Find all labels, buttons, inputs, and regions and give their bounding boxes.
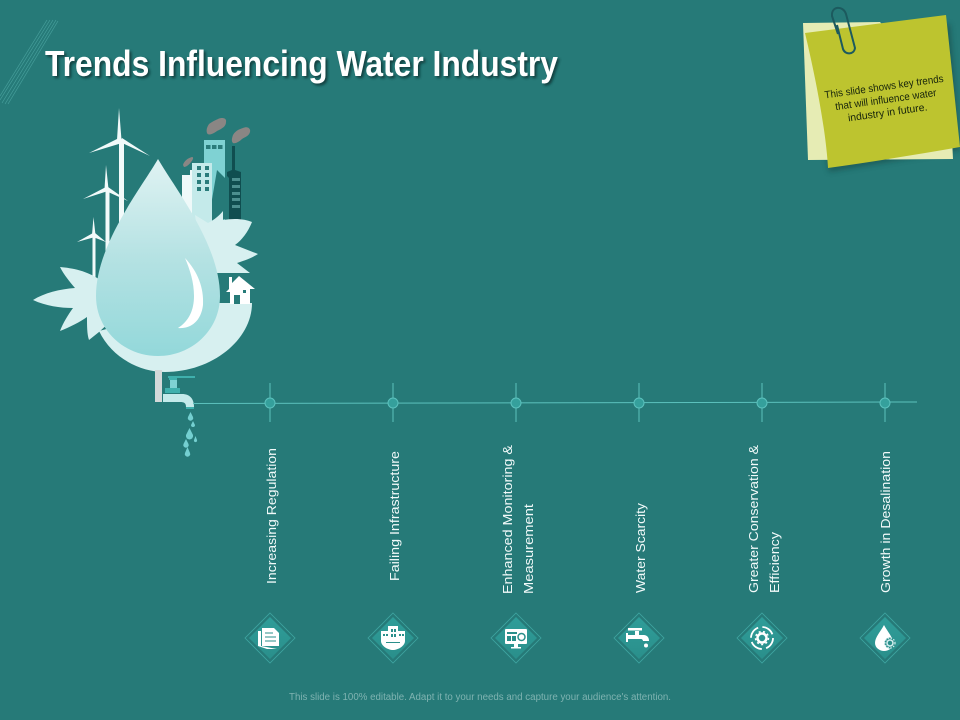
label: Failing Infrastructure: Failing Infrastructure bbox=[387, 451, 402, 581]
note text: that will influence water bbox=[835, 87, 938, 113]
icon: drop with gear bbox=[860, 613, 910, 663]
note back sheet bbox=[803, 22, 953, 160]
label: Growth in Desalination: Growth in Desalination bbox=[878, 451, 893, 593]
leaves right bbox=[195, 211, 258, 273]
wind turbine large bbox=[89, 108, 150, 225]
rotated trend labels bbox=[264, 445, 893, 594]
leaves left bbox=[33, 267, 112, 340]
icon: faucet bbox=[163, 376, 195, 409]
timeline bbox=[193, 383, 917, 422]
icon: city shield bbox=[368, 613, 418, 663]
title: Trends Influencing Water Industry bbox=[47, 45, 560, 86]
icon: gear cycle bbox=[737, 613, 787, 663]
title: Trends Influencing Water Industry bbox=[45, 43, 558, 84]
node 5 bbox=[757, 383, 767, 422]
wind turbine small bbox=[77, 217, 106, 285]
note text bbox=[824, 73, 948, 127]
node 6 bbox=[880, 383, 890, 422]
water drop bbox=[96, 159, 220, 356]
sticky note bbox=[803, 8, 960, 172]
node 1 bbox=[265, 383, 275, 422]
crescent bowl bbox=[99, 303, 252, 372]
icon: paper clip bbox=[832, 8, 855, 53]
dark chimney tower bbox=[227, 146, 241, 222]
wind turbine medium bbox=[83, 165, 128, 259]
label: Water Scarcity: Water Scarcity bbox=[633, 502, 648, 593]
pale tower bbox=[192, 163, 212, 233]
note text: industry in future. bbox=[847, 101, 928, 124]
label: Enhanced Monitoring & Measurement: Measurement bbox=[521, 504, 536, 594]
label: Greater Conservation & Efficiency: Greater Conservation & bbox=[746, 445, 761, 593]
label: Greater Conservation & Efficiency: Efficiency bbox=[767, 531, 782, 593]
pipe bbox=[155, 370, 162, 402]
smoke clouds bbox=[207, 118, 226, 134]
label: Enhanced Monitoring & Measurement: Enhanced Monitoring & bbox=[500, 445, 515, 594]
label: Increasing Regulation: Increasing Regulation bbox=[264, 448, 279, 584]
teal tower bbox=[204, 140, 225, 230]
footer note: This slide is 100% editable. Adapt it to your needs and capture your audience's attention. bbox=[289, 692, 671, 703]
note text: This slide shows key trends bbox=[824, 73, 944, 101]
note soft shadow bbox=[806, 24, 960, 172]
icon: monitor with gear bbox=[491, 613, 541, 663]
city buildings bbox=[182, 118, 250, 233]
house bbox=[226, 276, 255, 304]
icon: documents bbox=[245, 613, 295, 663]
label: Enhanced Monitoring & Measurement bbox=[500, 445, 536, 594]
illustration: water drop landscape bbox=[33, 108, 258, 457]
node 3 bbox=[511, 383, 521, 422]
white block bbox=[182, 175, 193, 225]
node 4 bbox=[634, 383, 644, 422]
water drips bbox=[183, 412, 197, 457]
drop highlight bbox=[178, 258, 203, 328]
decorative corner hatch bbox=[0, 20, 58, 104]
label: Greater Conservation & Efficiency bbox=[746, 445, 782, 593]
node 2 bbox=[388, 383, 398, 422]
icon: tap bbox=[614, 613, 664, 663]
note main sheet bbox=[805, 15, 960, 168]
